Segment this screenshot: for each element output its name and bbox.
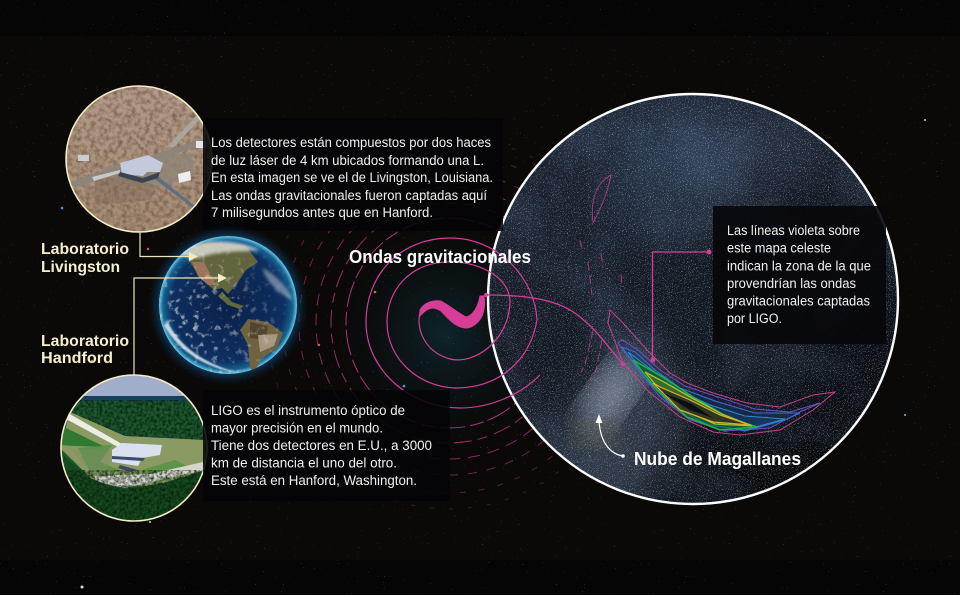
text box: Livingston: 7 milisegundos antes que en Hanford. <box>211 205 433 220</box>
text box: Livingston: de luz láser de 4 km ubicados formando una L. <box>211 153 484 168</box>
label: Laboratorio Livingston: Laboratorio <box>41 241 129 258</box>
text box: Hanford <box>203 390 450 501</box>
continents <box>185 242 283 372</box>
clouds <box>158 236 298 374</box>
text box: sky map: indican la zona de la que <box>727 258 871 273</box>
text box: sky map: Las líneas violeta sobre <box>727 223 860 238</box>
text box: sky map <box>713 206 886 344</box>
arrow: Hanford to earth <box>134 274 227 375</box>
label: Laboratorio Handford <box>41 333 129 367</box>
text box: Hanford: km de distancia el uno del otro. <box>211 455 397 470</box>
text box: Hanford: mayor precisión en el mundo. <box>211 421 383 436</box>
arrow: Nube de Magallanes <box>596 414 625 458</box>
spiral line <box>366 238 540 408</box>
text box: Livingston: En esta imagen se ve el de Livingston, Louisiana. <box>211 170 493 185</box>
sky map circle <box>488 94 898 510</box>
text box: sky map: por LIGO. <box>727 311 782 326</box>
label: Laboratorio Livingston: Livingston <box>41 259 120 276</box>
callout connector: contours to text <box>651 250 711 362</box>
photo: Hanford laboratory <box>62 376 206 520</box>
text box: Hanford: Este está en Hanford, Washington. <box>211 473 417 488</box>
probability contours <box>608 310 835 435</box>
photo: Livingston laboratory <box>66 86 211 232</box>
text box: Livingston <box>203 118 503 231</box>
gravitational wave rings <box>267 137 631 509</box>
photo ring: Hanford <box>61 375 207 521</box>
milky way glow <box>530 100 835 510</box>
text box: sky map: gravitacionales captadas <box>727 294 870 308</box>
heading: Ondas gravitacionales: Ondas gravitacionales <box>349 247 531 267</box>
arrow: Livingston to earth <box>140 232 198 261</box>
text box: sky map: provendrían las ondas <box>727 276 856 291</box>
text box: Livingston: Los detectores están compuestos por dos haces <box>211 135 491 150</box>
text box: Livingston: Las ondas gravitacionales fueron captadas aquí <box>211 188 487 203</box>
gravitational wave spiral <box>366 238 540 408</box>
text box: sky map: este mapa celeste <box>727 241 831 256</box>
label: Laboratorio Handford: Laboratorio <box>41 333 129 350</box>
label: Laboratorio Handford: Handford <box>41 350 113 367</box>
faint sky contours <box>580 175 622 380</box>
label: Laboratorio Livingston <box>41 241 129 276</box>
earth <box>148 225 308 385</box>
text box: Hanford: LIGO es el instrumento óptico de <box>211 403 405 418</box>
label: Nube de Magallanes: Nube de Magallanes <box>634 449 801 469</box>
connector: wave to sky map <box>484 293 625 366</box>
photo ring: Livingston <box>66 86 212 232</box>
thick wave <box>420 296 485 328</box>
text box: Hanford: Tiene dos detectores en E.U., a 3000 <box>211 438 432 453</box>
